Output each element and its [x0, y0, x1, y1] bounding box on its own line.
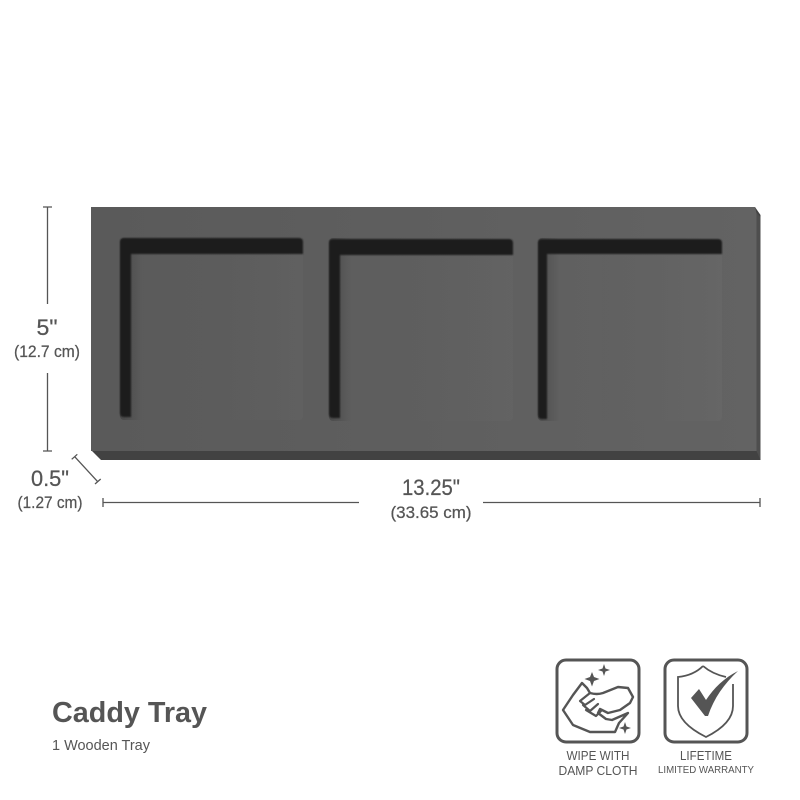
dimension: width 13.25 inches [103, 475, 760, 522]
tray body edge [91, 207, 760, 460]
well 1 [120, 238, 303, 420]
label: wipe with damp cloth: WIPE WITH [566, 749, 630, 763]
checkmark [691, 671, 738, 716]
label: lifetime limited warranty: LIMITED WARRANTY [658, 764, 754, 776]
width label: 13.25" [402, 475, 460, 500]
label: lifetime limited warranty [658, 749, 754, 776]
well 3 [538, 238, 722, 421]
height label: 5" [36, 315, 58, 340]
label: lifetime limited warranty: LIFETIME [680, 749, 732, 763]
dimension: height 5 inches [14, 207, 80, 451]
shield outline [678, 666, 733, 737]
tray top face [91, 207, 756, 451]
product: wooden tray [91, 207, 760, 460]
dimension: width 13.25 inches: (33.65 cm) [390, 503, 472, 522]
dimension: depth 0.5 inches [18, 454, 101, 512]
sparkles [584, 664, 631, 734]
cloth and hand [563, 683, 633, 732]
label: wipe with damp cloth [558, 749, 638, 778]
label: wipe with damp cloth: DAMP CLOTH [558, 764, 638, 778]
icon: lifetime warranty shield [665, 660, 747, 742]
icon: wipe with damp cloth [557, 660, 639, 742]
depth label: 0.5" [31, 466, 69, 491]
well 2 [329, 238, 513, 421]
title: Caddy Tray [52, 697, 207, 729]
tray right edge [756, 213, 760, 460]
subtitle: 1 Wooden Tray [52, 738, 151, 754]
dimension: depth 0.5 inches: (1.27 cm) [18, 493, 82, 512]
dimension: height 5 inches: (12.7 cm) [14, 342, 80, 361]
